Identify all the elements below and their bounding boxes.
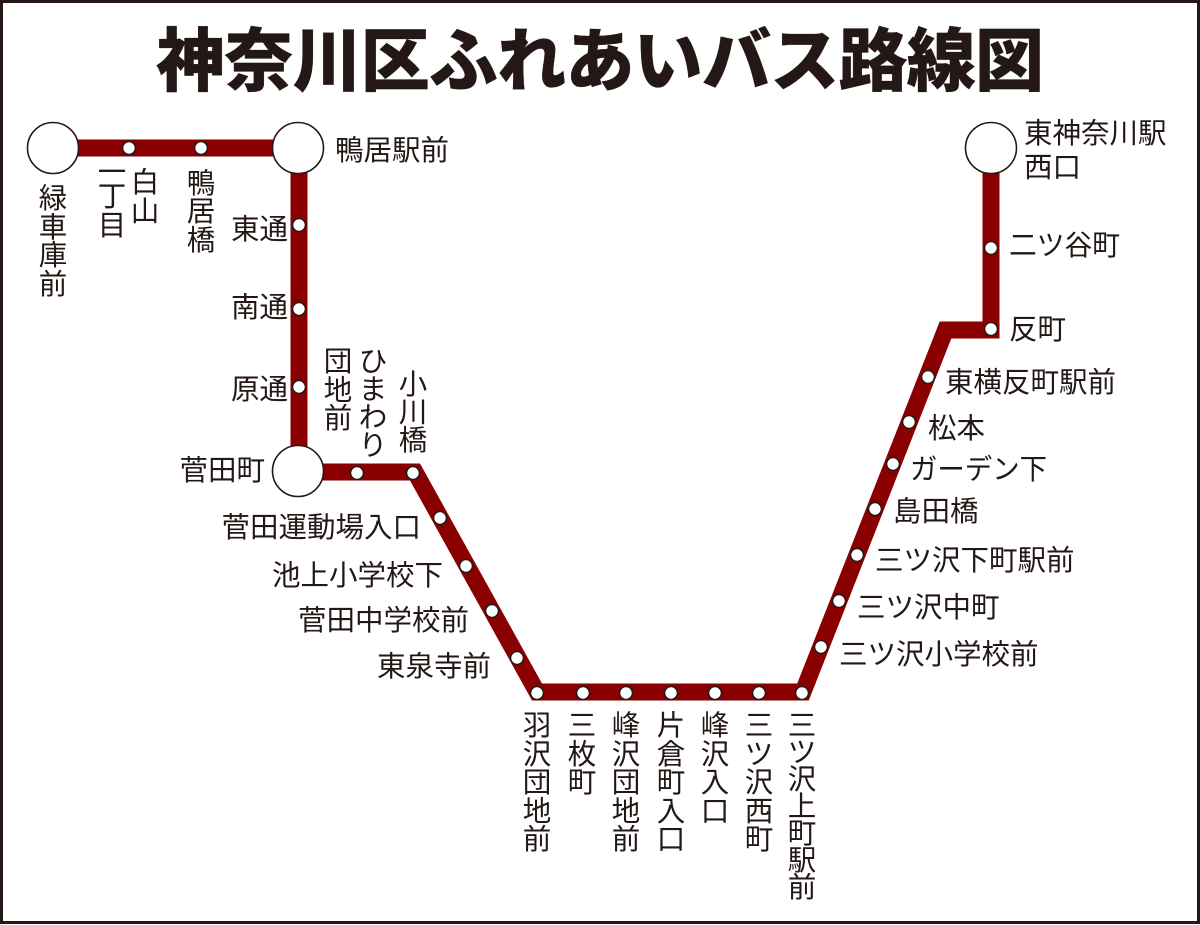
vertical stop labels: 菅田町 branch: 団地前 bbox=[324, 346, 352, 435]
minor stop markers bbox=[122, 142, 998, 700]
vertical stop labels: top left: 緑車庫前 bbox=[39, 183, 67, 301]
title: 神奈川区ふれあいバス路線図 bbox=[156, 23, 1044, 100]
horizontal stop labels: right side: 三ツ沢下町駅前 bbox=[875, 545, 1075, 577]
horizontal stop labels: left side: 原通 bbox=[231, 374, 288, 406]
horizontal stop labels: right side bbox=[335, 118, 1167, 671]
vertical stop labels: 菅田町 branch: 小川橋 bbox=[399, 369, 427, 457]
horizontal stop labels: left side: 菅田運動場入口 bbox=[221, 512, 421, 544]
horizontal stop labels: right side: 東横反町駅前 bbox=[945, 367, 1116, 399]
horizontal stop labels: right side: 西口 bbox=[1024, 152, 1081, 184]
bus route line bbox=[53, 148, 991, 692]
horizontal stop labels: left side bbox=[179, 214, 491, 683]
horizontal stop labels: left side: 東泉寺前 bbox=[377, 651, 491, 683]
vertical stop labels: bottom row: 三ツ沢西町 bbox=[745, 710, 773, 856]
vertical stop labels: top left: 白山 bbox=[131, 167, 159, 228]
horizontal stop labels: left side: 南通 bbox=[231, 292, 288, 324]
vertical stop labels: bottom row: 峰沢入口 bbox=[701, 710, 729, 828]
horizontal stop labels: right side: 三ツ沢中町 bbox=[857, 592, 1000, 624]
horizontal stop labels: right side: 二ツ谷町 bbox=[1009, 230, 1120, 262]
vertical stop labels: bottom row: 三枚町 bbox=[568, 710, 596, 799]
horizontal stop labels: right side: 東神奈川駅 bbox=[1024, 118, 1167, 150]
vertical stop labels: bottom row: 三ツ沢上町駅前 bbox=[788, 710, 816, 904]
vertical stop labels: bottom row: 峰沢団地前 bbox=[612, 710, 640, 856]
horizontal stop labels: right side: 反町 bbox=[1009, 314, 1066, 346]
horizontal stop labels: left side: 菅田町 bbox=[179, 455, 265, 487]
horizontal stop labels: right side: ガーデン下 bbox=[910, 454, 1047, 486]
vertical stop labels: 菅田町 branch bbox=[324, 346, 427, 462]
horizontal stop labels: right side: 松本 bbox=[928, 413, 985, 445]
vertical stop labels: bottom row bbox=[523, 710, 816, 904]
horizontal stop labels: right side: 鴨居駅前 bbox=[335, 135, 449, 167]
horizontal stop labels: right side: 三ツ沢小学校前 bbox=[839, 639, 1039, 671]
horizontal stop labels: right side: 島田橋 bbox=[893, 496, 979, 528]
terminal and major stops bbox=[28, 122, 1016, 496]
horizontal stop labels: left side: 菅田中学校前 bbox=[298, 605, 469, 637]
vertical stop labels: top left: 一丁目 bbox=[98, 157, 126, 242]
horizontal stop labels: left side: 東通 bbox=[231, 214, 288, 246]
vertical stop labels: top left bbox=[39, 157, 215, 301]
horizontal stop labels: left side: 池上小学校下 bbox=[272, 560, 443, 592]
vertical stop labels: bottom row: 羽沢団地前 bbox=[523, 710, 551, 856]
vertical stop labels: 菅田町 branch: ひまわり bbox=[359, 346, 387, 462]
vertical stop labels: top left: 鴨居橋 bbox=[187, 168, 215, 257]
vertical stop labels: bottom row: 片倉町入口 bbox=[657, 710, 685, 856]
